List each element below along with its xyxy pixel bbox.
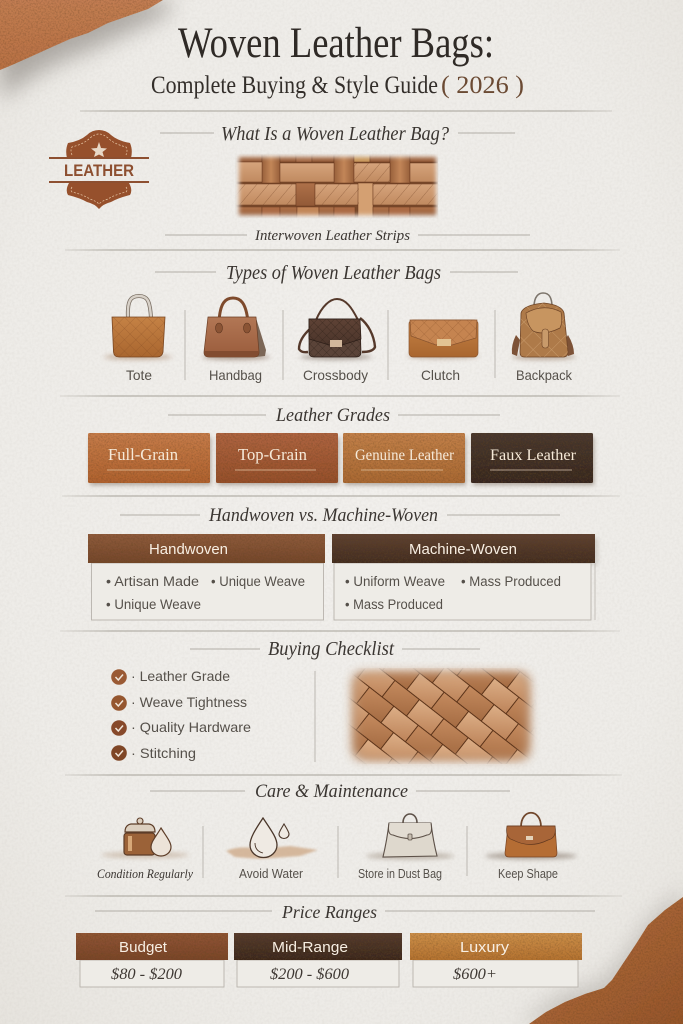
crossbody xyxy=(299,299,375,360)
price tier: budget: Budget xyxy=(119,940,167,956)
comparison: handwoven: Handwoven xyxy=(149,541,228,558)
comparison: handwoven: • Artisan Made xyxy=(106,574,199,589)
title: ( 2026 ) xyxy=(441,72,524,99)
icon: leather badge: LEATHER xyxy=(64,161,134,180)
price tier: luxury xyxy=(410,933,582,987)
heading: care and maintenance: Care & Maintenance xyxy=(255,781,408,802)
card: top-grain: Top-Grain xyxy=(238,445,307,464)
price tier: luxury: $600+ xyxy=(453,966,497,983)
heading: types of woven leather bags: Types of Woven Leather Bags xyxy=(226,262,441,284)
buying checklist xyxy=(111,668,251,761)
icon: dust bag xyxy=(366,814,454,860)
card: full-grain xyxy=(88,433,211,485)
heading: handwoven vs machine-woven: Handwoven vs. Machine-Woven xyxy=(208,505,438,526)
checklist item: quality hardware: · Quality Hardware xyxy=(131,719,251,735)
heading: buying checklist: Buying Checklist xyxy=(268,638,394,660)
care labels xyxy=(97,867,558,881)
icon: leather badge xyxy=(49,130,149,209)
woven leather strip image xyxy=(235,154,438,218)
bag type labels: Handbag xyxy=(209,367,262,383)
heading: what is a woven leather bag: What Is a Woven Leather Bag? xyxy=(221,123,449,145)
torn leather corner: bottom right xyxy=(520,888,683,1024)
caption: interwoven leather strips: Interwoven Leather Strips xyxy=(254,228,410,244)
price tier: budget: $80 - $200 xyxy=(111,966,182,983)
price tier: budget xyxy=(76,933,228,987)
care labels: Condition Regularly xyxy=(97,867,193,881)
card: genuine leather xyxy=(343,433,466,485)
price tier: luxury: Luxury xyxy=(460,940,510,956)
checklist item: stitching: · Stitching xyxy=(131,745,196,761)
heading: price ranges: Price Ranges xyxy=(281,902,377,922)
comparison: machine-woven: Machine-Woven xyxy=(409,541,517,558)
price tier: mid-range: $200 - $600 xyxy=(270,966,349,983)
comparison: handwoven: • Unique Weave xyxy=(211,574,305,589)
card: full-grain: Full-Grain xyxy=(108,445,178,464)
title: Woven Leather Bags: xyxy=(178,20,494,67)
card: top-grain xyxy=(216,433,339,485)
title xyxy=(151,20,524,99)
comparison: machine-woven: • Uniform Weave xyxy=(345,574,445,589)
bag type labels: Crossbody xyxy=(303,367,368,383)
icon: keep shape bag xyxy=(485,813,577,860)
bag type labels: Clutch xyxy=(421,367,460,383)
care labels: Keep Shape xyxy=(498,867,558,881)
backpack xyxy=(512,293,576,360)
card: faux leather: Faux Leather xyxy=(490,447,577,464)
torn leather corner: top left xyxy=(0,0,175,100)
checklist item: leather grade: · Leather Grade xyxy=(131,668,230,684)
icon: conditioner jar and drop xyxy=(101,818,189,858)
clutch xyxy=(407,320,479,359)
bag type labels xyxy=(126,367,573,383)
card: faux leather xyxy=(471,433,594,485)
woven leather swatch image xyxy=(340,668,540,764)
tote xyxy=(104,296,172,360)
comparison: handwoven: • Unique Weave xyxy=(106,597,201,612)
title: Complete Buying & Style Guide xyxy=(151,72,438,99)
bag type labels: Tote xyxy=(126,367,152,383)
card: genuine leather: Genuine Leather xyxy=(355,447,455,464)
care icons xyxy=(101,813,577,860)
bag types row xyxy=(104,293,576,360)
price tier: mid-range: Mid-Range xyxy=(272,940,348,956)
price tier: mid-range xyxy=(234,933,402,987)
handbag xyxy=(202,298,270,360)
icon: water drop xyxy=(226,818,318,859)
checklist item: weave tightness: · Weave Tightness xyxy=(131,694,247,710)
comparison: machine-woven: • Mass Produced xyxy=(345,597,443,612)
comparison: handwoven xyxy=(88,534,325,620)
heading: leather grades: Leather Grades xyxy=(275,405,390,426)
care labels: Avoid Water xyxy=(239,867,303,881)
comparison: machine-woven xyxy=(332,534,598,620)
care labels: Store in Dust Bag xyxy=(358,867,442,881)
bag type labels: Backpack xyxy=(516,367,573,383)
comparison: machine-woven: • Mass Produced xyxy=(461,574,561,589)
leather grade cards xyxy=(88,433,594,485)
